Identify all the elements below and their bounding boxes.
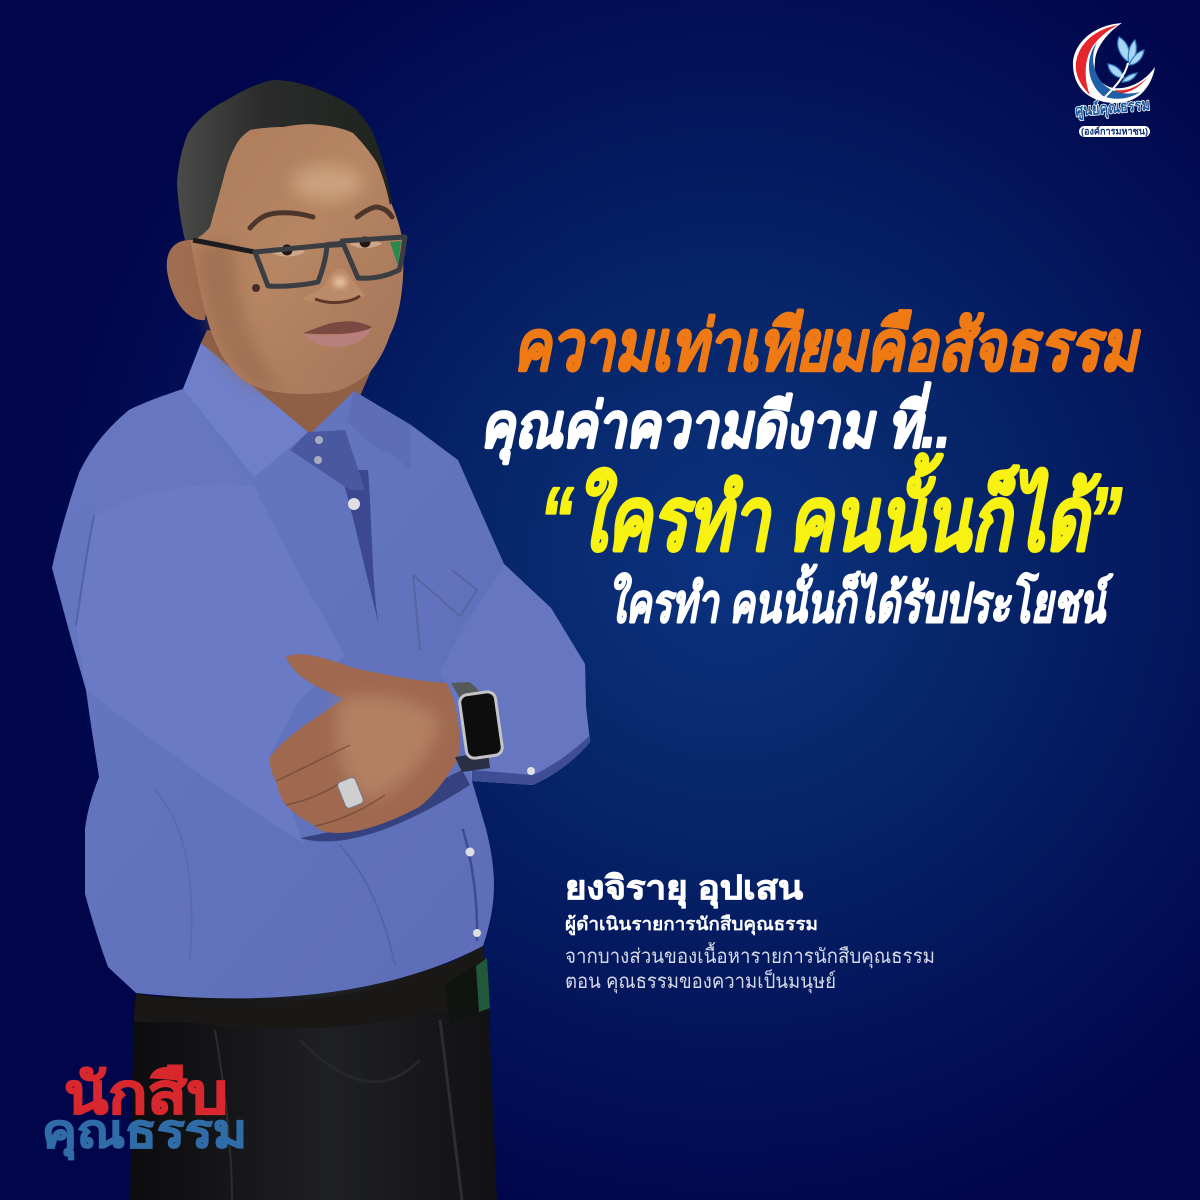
nose [303,268,365,304]
eyes [270,236,382,256]
logo: organisation emblem [1073,23,1155,138]
emblem name: ศูนย์คุณธรรม [1074,95,1151,122]
right cuff underside [472,735,590,785]
speaker name: ยงจิรายุ อุปเสน [565,869,803,909]
source line 1: จากบางส่วนของเนื้อหารายการนักสืบคุณธรรม [565,942,935,969]
face shading [197,165,363,393]
crescent [1073,23,1155,103]
speaker role: ผู้ดำเนินรายการนักสืบคุณธรรม [565,914,818,936]
logo: programme title [42,1062,247,1160]
shoulder tone [79,389,254,516]
hair [177,80,392,240]
buttons [314,436,535,937]
glasses [193,237,405,286]
shirt placket shadow [340,470,379,625]
hand [269,654,459,833]
logo: programme title: คุณธรรม [42,1105,247,1160]
flower [1105,37,1144,97]
crescent red [1076,25,1148,95]
source line 2: ตอน คุณธรรมของความเป็นมนุษย์ [565,968,836,994]
logo: programme title: นักสืบ [64,1062,228,1125]
shirt torso [52,343,590,998]
eyebrows [250,207,392,228]
shadow under hand [300,770,470,841]
shirt folds [76,516,477,965]
pocket [413,570,477,650]
neck [201,330,380,436]
emblem subtitle: (องค์การมหาชน) [1081,126,1148,138]
face [190,104,403,394]
crescent blue [1089,42,1140,99]
ear [167,240,212,320]
person portrait [52,80,590,1200]
trousers [130,960,497,1200]
belt [134,946,490,1029]
left sleeve [76,484,345,844]
right forearm [440,564,590,785]
ring [336,776,365,809]
mole [252,284,260,292]
headline: white line: คุณค่าความดีงาม ที่.. [480,382,950,465]
watch [451,682,503,772]
lips [303,321,372,347]
collar right [347,391,411,469]
collar inner shadow [290,430,365,490]
collar left [183,343,308,477]
